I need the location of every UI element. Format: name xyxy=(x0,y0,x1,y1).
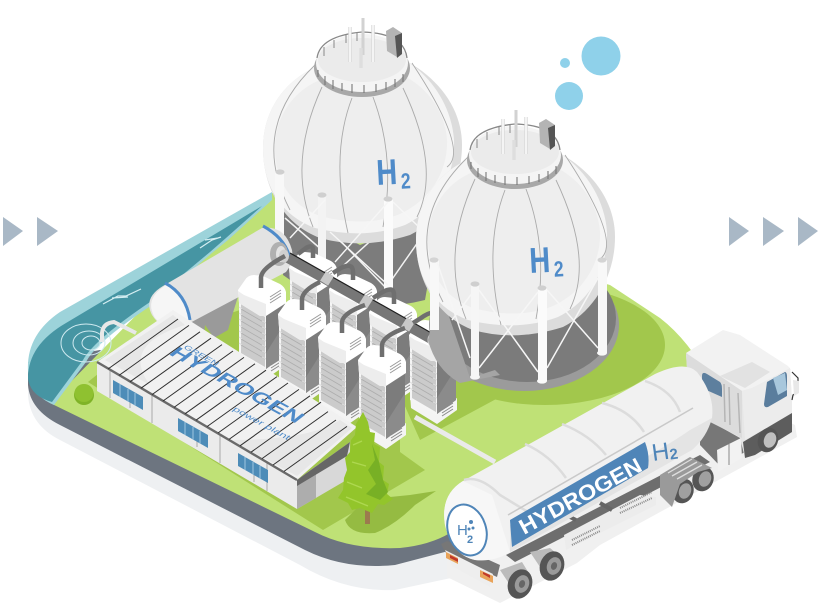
bush xyxy=(74,384,94,405)
tank one: sphere xyxy=(263,18,462,243)
ground: dark green shadow areas xyxy=(88,285,665,530)
tank two: sphere xyxy=(416,110,615,335)
ground feed pipe xyxy=(415,417,495,462)
roof lettering xyxy=(164,344,309,442)
tank one: legs xyxy=(275,169,420,291)
river water xyxy=(28,192,272,405)
electrolyser units: back row xyxy=(289,252,457,424)
tank two: concrete base xyxy=(428,254,619,391)
building side wall xyxy=(297,442,350,509)
tanker rear H2 emblem: 2 xyxy=(467,534,473,546)
tanker rear cap xyxy=(444,481,510,560)
tanker rear H2 emblem: H xyxy=(457,522,468,539)
seagull wave marks xyxy=(103,237,221,304)
tree xyxy=(338,412,436,533)
pipe elbows from front units xyxy=(261,256,405,357)
tanker H2 label: 2 xyxy=(669,446,679,464)
pipe elbows from back units xyxy=(298,246,435,327)
truck cab xyxy=(686,330,799,458)
roof lettering: power plant xyxy=(231,405,293,442)
building roof xyxy=(97,310,357,480)
roof lettering: HYDROGEN xyxy=(164,344,309,427)
truck ground shadow xyxy=(447,380,797,603)
windows xyxy=(113,380,268,483)
right progress arrows xyxy=(729,217,818,246)
tank one: H2 label: 2 xyxy=(400,169,411,194)
tank two: H2 label: H xyxy=(528,239,551,281)
tractor wheels and fender xyxy=(660,420,745,507)
ground: light green island xyxy=(50,193,720,548)
tanker H2 label: H xyxy=(650,438,671,467)
roof ribs xyxy=(108,319,347,471)
blue HYDROGEN band xyxy=(510,442,649,547)
water ripples xyxy=(61,324,111,362)
power plant building xyxy=(97,310,357,509)
hydrogen truck xyxy=(441,330,799,602)
building front wall xyxy=(97,362,297,509)
tank two: H2 label: 2 xyxy=(553,257,564,282)
platform dark edge band xyxy=(28,350,460,566)
small water intake pipe xyxy=(102,322,136,342)
light green path patch xyxy=(428,425,490,456)
tanker body xyxy=(444,366,712,560)
tank two: legs and cross-bracing xyxy=(430,257,607,384)
tank one: support base and legs xyxy=(283,205,440,306)
roof lettering: GREEN xyxy=(182,344,221,367)
rear wheels xyxy=(500,548,568,602)
HYDROGEN label: HYDROGEN xyxy=(515,453,646,539)
electrolyser units: front row xyxy=(238,275,406,449)
left progress arrows xyxy=(3,217,58,246)
tanker rear H2 emblem xyxy=(441,499,493,561)
rear chassis and ladder xyxy=(441,455,710,587)
tank one: H2 label: H xyxy=(375,151,398,193)
main manifold pipe xyxy=(279,250,438,347)
hydrogen bubbles xyxy=(555,36,620,110)
platform underside shadow xyxy=(28,300,465,590)
storage cylinder xyxy=(149,226,292,347)
